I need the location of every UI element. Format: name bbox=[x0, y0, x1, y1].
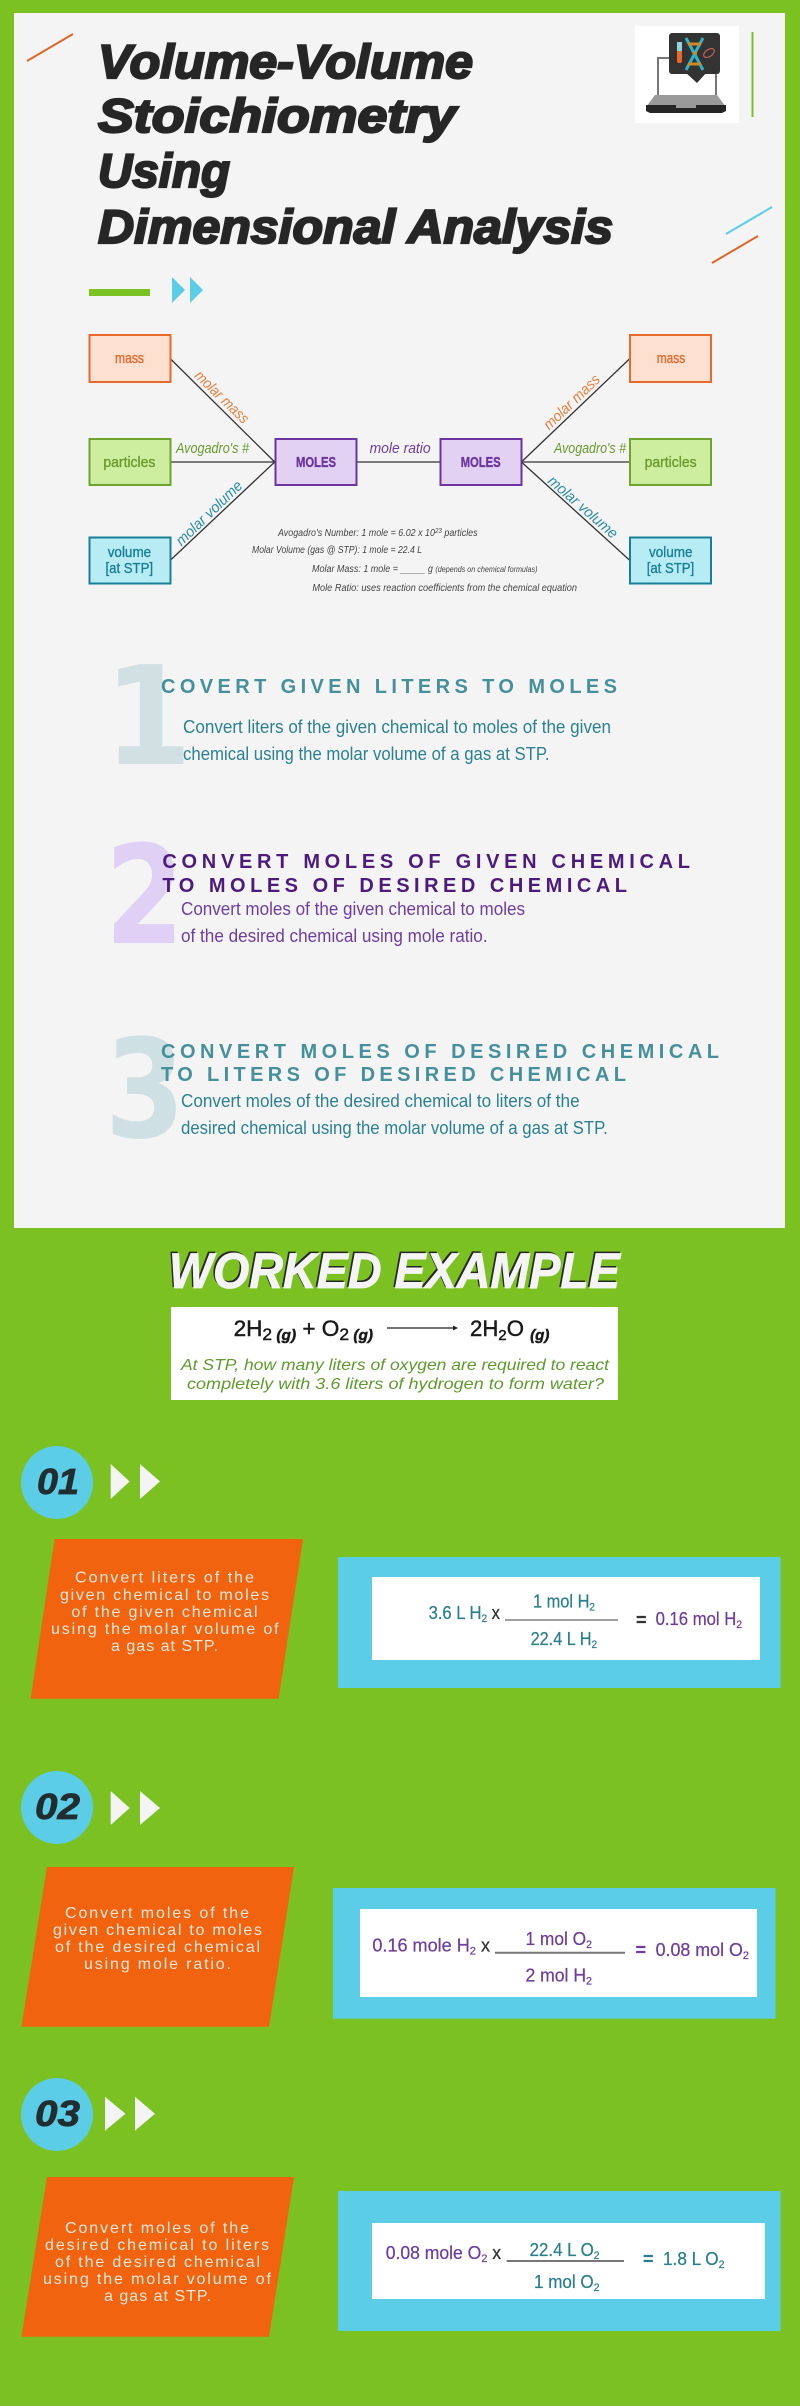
title: Dimensional Analysis bbox=[98, 200, 613, 253]
connector label: molar mass left: molar mass bbox=[191, 367, 253, 428]
step 3 heading: CONVERT MOLES OF DESIRED CHEMICAL bbox=[161, 1041, 719, 1063]
calculation panel 02: = bbox=[636, 1940, 646, 1960]
calculation panel 02: 2 bbox=[586, 1976, 592, 1988]
calculation panel 02: 0.16 mole H bbox=[372, 1936, 469, 1956]
reaction arrow bbox=[387, 1326, 458, 1330]
box: particles left: particles bbox=[103, 454, 155, 471]
instruction panel 02: using mole ratio. bbox=[84, 1956, 231, 1973]
instruction panel 02: given chemical to moles bbox=[53, 1922, 262, 1939]
chemical equation: 2 bbox=[339, 1325, 349, 1344]
step 3 bbox=[105, 1011, 719, 1170]
step 3 heading: TO LITERS OF DESIRED CHEMICAL bbox=[161, 1064, 626, 1086]
box: mass right: mass bbox=[657, 350, 685, 367]
question text: At STP, how many liters of oxygen are required to react bbox=[180, 1357, 610, 1374]
calculation panel 03: 1.8 L O bbox=[663, 2249, 721, 2269]
step 1 text bbox=[183, 717, 611, 764]
calculation panel 02: 2 bbox=[470, 1946, 476, 1958]
calculation panel 02: 0.08 mol O bbox=[656, 1940, 744, 1960]
instruction panel 03: Convert moles of the bbox=[65, 2220, 249, 2237]
title: Volume-Volume bbox=[98, 35, 473, 88]
accent line right vertical bbox=[752, 32, 754, 117]
calculation panel 01: 2 bbox=[736, 1619, 742, 1631]
box: volume left bbox=[90, 538, 170, 584]
calculation panel 01: 22.4 L H bbox=[531, 1629, 598, 1649]
connector label: Avogadro left: Avogadro's # bbox=[175, 440, 250, 457]
icon: laptop with chemistry bubble bbox=[635, 26, 739, 123]
icon: arrows 02 bbox=[111, 1791, 160, 1825]
connector label: molar mass right: molar mass bbox=[540, 371, 604, 433]
box: particles right: particles bbox=[645, 454, 697, 471]
diagram: mole map bbox=[90, 335, 711, 594]
calculation panel 01: 3.6 L H bbox=[429, 1603, 486, 1623]
conversion factors text: Molar Mass: 1 mole = _____ g (depends on chemical formulas) bbox=[312, 564, 538, 575]
connector lines bbox=[171, 359, 629, 560]
box: volume right: [at STP] bbox=[647, 560, 694, 577]
box: volume left: volume bbox=[108, 544, 151, 561]
conversion factors text: Molar Volume (gas @ STP): 1 mole = 22.4 L bbox=[252, 545, 422, 556]
calculation panel 03: = bbox=[643, 2249, 654, 2269]
instruction panel 02: Convert moles of the bbox=[65, 1905, 249, 1922]
calculation panel 03: x bbox=[487, 2243, 501, 2263]
chemical equation: 2H bbox=[234, 1316, 262, 1341]
connector label: mole ratio: mole ratio bbox=[370, 440, 431, 457]
instruction panel 01: Convert liters of the bbox=[75, 1570, 254, 1587]
box: moles left bbox=[276, 439, 356, 485]
conversion factors text: Mole Ratio: uses reaction coefficients from the chemical equation bbox=[312, 583, 577, 594]
calculation panel 02: 1 mol O bbox=[526, 1929, 589, 1949]
instruction panel 03: of the desired chemical bbox=[55, 2254, 260, 2271]
calculation panel 03: 1 mol O bbox=[534, 2272, 597, 2292]
green bar bbox=[89, 289, 150, 296]
instruction panel 01 bbox=[31, 1539, 303, 1699]
calculation panel 01: 1 mol H bbox=[533, 1592, 595, 1612]
step 1 text: Convert liters of the given chemical to moles of the given bbox=[183, 717, 611, 737]
numeral 2: 2 bbox=[105, 817, 184, 976]
box: mass left: mass bbox=[115, 350, 144, 367]
conversion factors text bbox=[252, 528, 577, 594]
box: mass right bbox=[630, 335, 711, 382]
box: moles left: MOLES bbox=[296, 454, 336, 471]
chemical equation: O bbox=[507, 1316, 530, 1341]
chemical equation: 2 bbox=[262, 1325, 272, 1344]
calculation panel 03: 2 bbox=[719, 2259, 724, 2271]
calculation panel 03 bbox=[338, 2191, 781, 2331]
worked step 02 bbox=[21, 1771, 776, 2027]
box: moles right: MOLES bbox=[461, 454, 501, 471]
icon: arrows 03 bbox=[105, 2097, 155, 2131]
badge 03 bbox=[21, 2078, 93, 2151]
calculation panel 03: 2 bbox=[594, 2282, 600, 2294]
calculation panel 01: x bbox=[487, 1603, 500, 1623]
step 3 text: Convert moles of the desired chemical to liters of the bbox=[181, 1091, 580, 1111]
numeral 1: 1 bbox=[104, 638, 192, 797]
chemical equation: (g) bbox=[272, 1327, 296, 1344]
connector label: molar volume right: molar volume bbox=[544, 472, 621, 542]
step 2 text: of the desired chemical using mole ratio. bbox=[181, 926, 488, 946]
title: Stoichiometry bbox=[98, 89, 459, 142]
calculation panel 03: 22.4 L O bbox=[530, 2240, 598, 2260]
panel: intro bbox=[14, 13, 785, 1228]
box: moles right bbox=[440, 439, 522, 485]
chemical equation: 2H bbox=[470, 1316, 498, 1341]
calculation panel 01: 0.16 mol H bbox=[656, 1609, 743, 1629]
calculation panel 02: 2 bbox=[586, 1939, 592, 1951]
accent line blue bbox=[726, 207, 772, 234]
chemical equation: 2 bbox=[498, 1327, 507, 1344]
numeral 3: 3 bbox=[105, 1011, 185, 1170]
instruction panel 03 bbox=[21, 2177, 294, 2337]
calculation panel 02: 2 mol H bbox=[526, 1966, 588, 1986]
badge 02 bbox=[21, 1771, 93, 1844]
accent line top left bbox=[27, 34, 73, 61]
conversion factors text: Avogadro's Number: 1 mole = 6.02 x 10 bbox=[278, 528, 454, 539]
calculation panel 02: 2 bbox=[743, 1950, 749, 1962]
connector label: Avogadro right: Avogadro's # bbox=[553, 440, 627, 457]
calculation panel 01: 2 bbox=[591, 1639, 597, 1651]
calculation panel 02: x bbox=[476, 1936, 490, 1956]
calculation panel 03: 2 bbox=[594, 2250, 600, 2262]
box: mass left bbox=[90, 335, 170, 382]
worked step 03 bbox=[21, 2078, 781, 2337]
calculation panel 01: 2 bbox=[589, 1602, 595, 1614]
heading: worked example: WORKED EXAMPLE bbox=[168, 1242, 620, 1298]
step 1 text: chemical using the molar volume of a gas at STP. bbox=[183, 744, 550, 764]
step 1 bbox=[104, 638, 617, 797]
worked step 01 bbox=[21, 1446, 781, 1699]
icon: arrows 01 bbox=[111, 1464, 160, 1499]
instruction panel 03: a gas at STP. bbox=[104, 2288, 211, 2305]
heading: worked example: WORKED EXAMPLE bbox=[169, 1243, 622, 1299]
step 2 heading: CONVERT MOLES OF GIVEN CHEMICAL bbox=[162, 851, 690, 873]
conversion factors text: 23 bbox=[434, 528, 442, 535]
box: volume right: volume bbox=[649, 544, 692, 561]
calculation panel 03: 0.08 mole O bbox=[386, 2243, 484, 2263]
question text: completely with 3.6 liters of hydrogen to form water? bbox=[187, 1376, 604, 1393]
chemical equation: (g) bbox=[530, 1327, 549, 1344]
step 3 text bbox=[181, 1091, 608, 1138]
box: volume right bbox=[630, 538, 711, 584]
icon: double arrows bbox=[172, 277, 203, 303]
accent line orange bbox=[712, 236, 758, 263]
badge 01 bbox=[21, 1446, 93, 1519]
step 2 bbox=[105, 817, 690, 976]
calculation panel 01 bbox=[338, 1557, 781, 1688]
calculation panel 01: 2 bbox=[481, 1613, 487, 1625]
step 2 text bbox=[181, 899, 525, 946]
title bbox=[98, 35, 613, 253]
chemical equation: (g) bbox=[349, 1327, 373, 1344]
panel: reaction and question bbox=[171, 1307, 618, 1400]
step 2 heading: TO MOLES OF DESIRED CHEMICAL bbox=[162, 875, 627, 897]
step 3 text: desired chemical using the molar volume of a gas at STP. bbox=[181, 1118, 608, 1138]
instruction panel 03: desired chemical to liters bbox=[45, 2237, 269, 2254]
chemical equation: + O bbox=[296, 1316, 339, 1341]
box: particles left bbox=[90, 439, 170, 485]
calculation panel 02 bbox=[333, 1888, 776, 2019]
title: Using bbox=[98, 144, 230, 197]
chemical equation bbox=[234, 1316, 549, 1344]
badge 03: 03 bbox=[35, 2093, 80, 2134]
step 2 heading bbox=[162, 851, 690, 897]
instruction panel 01: using the molar volume of bbox=[51, 1621, 279, 1638]
question text bbox=[180, 1357, 610, 1393]
step 3 heading bbox=[161, 1041, 719, 1086]
box: volume left: [at STP] bbox=[106, 560, 153, 577]
instruction panel 03: using the molar volume of bbox=[43, 2271, 272, 2288]
conversion factors text: particles bbox=[442, 528, 478, 539]
badge 01: 01 bbox=[37, 1461, 79, 1502]
calculation panel 01: = bbox=[636, 1610, 647, 1630]
badge 02: 02 bbox=[35, 1786, 80, 1827]
step 1 heading: COVERT GIVEN LITERS TO MOLES bbox=[161, 676, 617, 698]
connector label: molar volume left: molar volume bbox=[173, 477, 246, 549]
box: particles right bbox=[630, 439, 711, 485]
step 2 text: Convert moles of the given chemical to moles bbox=[181, 899, 525, 919]
instruction panel 01: of the given chemical bbox=[71, 1604, 258, 1621]
instruction panel 01: a gas at STP. bbox=[111, 1638, 218, 1655]
instruction panel 02 bbox=[21, 1867, 294, 2027]
calculation panel 03: 2 bbox=[481, 2253, 487, 2265]
instruction panel 02: of the desired chemical bbox=[55, 1939, 260, 1956]
instruction panel 01: given chemical to moles bbox=[60, 1587, 269, 1604]
